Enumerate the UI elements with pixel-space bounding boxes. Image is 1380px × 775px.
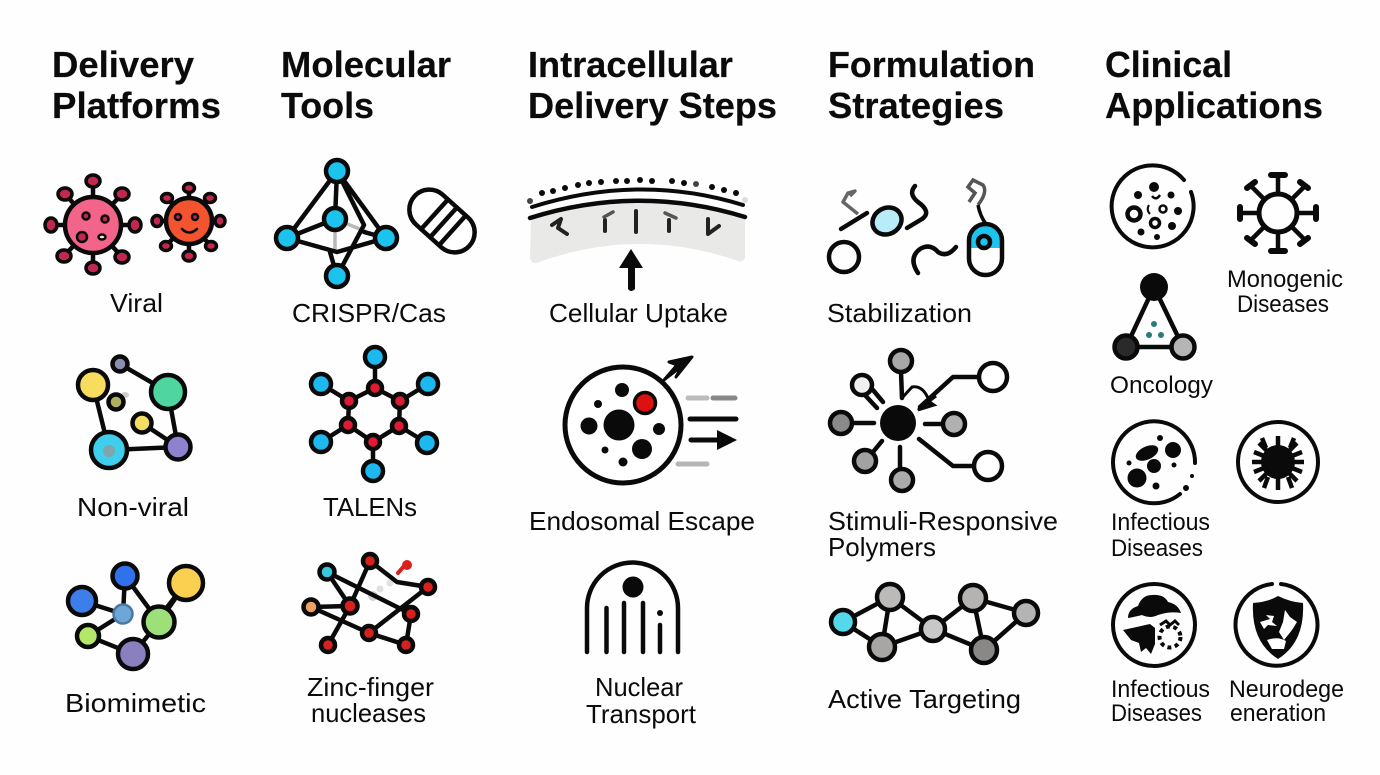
label: neurodegeneration: eneration [1230, 700, 1326, 727]
heading: clinical applications: Applications [1105, 85, 1323, 126]
icon: cell membrane uptake [527, 177, 748, 291]
heading: delivery platforms: Delivery [52, 44, 194, 85]
label: infectious diseases lower: Diseases [1111, 700, 1202, 727]
label: zinc-finger nucleases: nucleases [311, 698, 426, 728]
label: zinc-finger nucleases: Zinc-finger [307, 672, 434, 702]
label: neurodegeneration: Neurodege [1229, 676, 1344, 703]
label: non-viral: Non-viral [77, 492, 189, 522]
heading: intracellular delivery steps: Delivery Steps [528, 85, 777, 126]
panel: intracellular delivery steps [527, 44, 777, 729]
heading: molecular tools: Tools [281, 85, 374, 126]
icon: virus in circle [1238, 422, 1318, 502]
icon: cell with particles [1112, 165, 1194, 247]
label: biomimetic: Biomimetic [65, 688, 206, 718]
icon: viral particles [45, 175, 225, 274]
icon: triangle network [1114, 273, 1194, 358]
icon: stimuli-responsive polymers [830, 350, 1007, 491]
label: nuclear transport: Transport [586, 699, 697, 729]
arrow: escape [664, 357, 692, 380]
label: oncology: Oncology [1110, 372, 1213, 399]
label: infectious diseases: Infectious [1111, 509, 1210, 536]
panel: molecular tools [276, 44, 483, 728]
arrow: uptake [619, 249, 643, 291]
icon: pathogens in circle [1113, 584, 1195, 666]
heading: delivery platforms: Platforms [52, 85, 221, 126]
panel: formulation strategies [827, 44, 1058, 714]
label: infectious diseases [1111, 509, 1210, 562]
label: viral: Viral [110, 288, 163, 318]
heading: formulation strategies [828, 44, 1035, 126]
label: endosomal escape: Endosomal Escape [529, 506, 755, 536]
heading: intracellular delivery steps: Intracellular [528, 44, 733, 85]
label: stabilization: Stabilization [827, 298, 972, 328]
label: infectious diseases: Diseases [1111, 535, 1203, 562]
heading: molecular tools [281, 44, 451, 126]
icon: endosomal escape [565, 357, 737, 483]
label: monogenic diseases: Diseases [1237, 291, 1329, 318]
label: monogenic diseases [1227, 266, 1343, 318]
label: monogenic diseases: Monogenic [1227, 266, 1343, 293]
panel: delivery platforms [45, 44, 225, 718]
icon: capsule [401, 181, 483, 261]
heading: intracellular delivery steps [528, 44, 777, 126]
icon: biomimetic network [68, 564, 203, 669]
label: CRISPR/Cas: CRISPR/Cas [292, 298, 446, 328]
icon: stabilization [829, 180, 1002, 275]
label: infectious diseases lower: Infectious [1111, 676, 1210, 703]
icon: active targeting chain [831, 584, 1038, 663]
icon: virus outline [1240, 175, 1316, 251]
label: stimuli-responsive polymers: Polymers [828, 532, 936, 562]
label: stimuli-responsive polymers: Stimuli-Responsive [828, 506, 1058, 536]
heading: molecular tools: Molecular [281, 44, 451, 85]
label: neurodegeneration [1229, 676, 1344, 727]
icon: cell with infection [1113, 421, 1195, 503]
heading: delivery platforms [52, 44, 221, 126]
icon: CRISPR/Cas complex [276, 160, 397, 287]
label: active targeting: Active Targeting [828, 684, 1021, 714]
label: infectious diseases lower [1111, 676, 1210, 727]
label: nuclear transport [586, 672, 697, 729]
icon: brain shield [1236, 584, 1317, 666]
heading: formulation strategies: Strategies [828, 85, 1004, 126]
label: cellular uptake: Cellular Uptake [549, 298, 728, 328]
icon: TALENs hexagon [311, 347, 438, 481]
icon: zinc-finger network [304, 554, 435, 652]
heading: clinical applications [1105, 44, 1323, 126]
label: TALENs: TALENs [323, 492, 417, 522]
panel: clinical applications [1105, 44, 1344, 727]
label: zinc-finger nucleases [307, 672, 434, 728]
label: stimuli-responsive polymers [828, 506, 1058, 562]
icon: non-viral nanoparticle network [78, 356, 190, 468]
heading: clinical applications: Clinical [1105, 44, 1232, 85]
icon: nuclear transport [587, 562, 678, 652]
label: nuclear transport: Nuclear [595, 672, 683, 702]
heading: formulation strategies: Formulation [828, 44, 1035, 85]
